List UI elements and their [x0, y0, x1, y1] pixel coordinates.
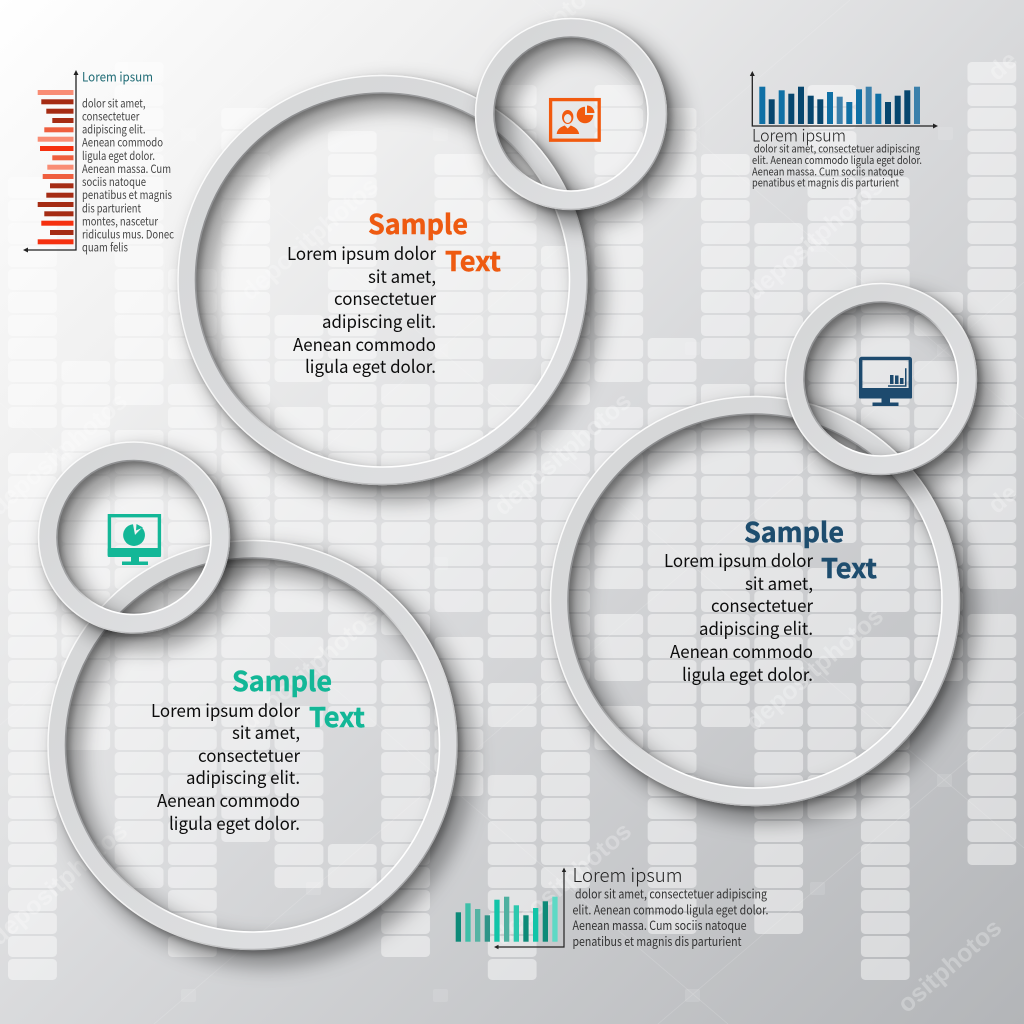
text block: right ring: Text — [821, 547, 877, 586]
text block: right ring: Lorem ipsum dolor — [664, 548, 813, 573]
watermark text: depositphotos — [236, 602, 384, 736]
mini chart text: top left: consectetuer — [82, 108, 140, 124]
mini chart text: top left: adipiscing elit. — [82, 122, 146, 138]
text block: left ring: ligula eget dolor. — [169, 811, 300, 836]
text block: right ring — [664, 511, 877, 687]
small ring: right — [785, 283, 977, 475]
mini chart text: top left: dolor sit amet, — [82, 96, 146, 112]
text block: left ring: Lorem ipsum dolor — [151, 698, 300, 723]
watermark text: depositphotos — [741, 602, 889, 736]
text block: left ring: Aenean commodo — [157, 788, 300, 813]
text block: left ring: consectetuer — [198, 743, 300, 768]
mini chart: bottom vertical bars — [456, 868, 566, 949]
mini chart text: bottom: Aenean massa. Cum sociis natoque — [572, 915, 747, 934]
mini chart: top right vertical bars — [750, 71, 938, 128]
mini chart text: top right: dolor sit amet, consectetuer adipiscing — [754, 142, 920, 156]
mini chart text: top right: penatibus et magnis dis parturient — [752, 176, 899, 190]
mini chart text: top left: Aenean commodo — [82, 135, 163, 151]
mini chart text: top left: sociis natoque — [82, 174, 146, 190]
mini chart text: bottom: dolor sit amet, consectetuer adipiscing — [575, 884, 767, 902]
text block: right ring: sit amet, — [745, 571, 813, 596]
watermark text: depositphotos — [489, 387, 637, 521]
text block: top ring: Lorem ipsum dolor — [287, 241, 436, 266]
mini chart text: top left: quam felis — [82, 240, 128, 256]
mini chart text: bottom — [572, 861, 768, 950]
watermark camera marks — [181, 127, 953, 1002]
big ring: top — [177, 75, 587, 485]
mini chart text: top left: ligula eget dolor. — [82, 148, 155, 164]
text block: right ring: Sample — [744, 511, 844, 550]
watermark text: depositphotos — [489, 817, 637, 951]
icon: monitor with pie chart — [108, 516, 161, 565]
mini chart text: top left: montes, nascetur — [82, 214, 158, 230]
icon: presenter with pie chart — [551, 100, 599, 140]
small ring: left — [38, 442, 230, 634]
big ring: right — [550, 396, 960, 806]
mini chart text: top right: Aenean massa. Cum sociis natoque — [752, 164, 904, 180]
text block: top ring: consectetuer — [334, 286, 436, 311]
text block: right ring: adipiscing elit. — [699, 616, 813, 641]
text block: left ring: Text — [309, 696, 365, 735]
mini chart text: top right: elit. Aenean commodo ligula eget dolor. — [752, 153, 922, 168]
mini chart text: bottom: elit. Aenean commodo ligula eget dolor. — [572, 900, 768, 918]
watermark text: depositphotos — [741, 172, 889, 306]
mini chart text: top left: Aenean massa. Cum — [82, 161, 171, 177]
text block: left ring: adipiscing elit. — [186, 765, 300, 790]
watermark text: de — [983, 479, 1023, 519]
big ring: left — [48, 540, 458, 950]
mini chart text: top right — [752, 122, 922, 190]
text block: top ring: Sample — [368, 203, 468, 242]
text block: top ring: Text — [445, 240, 501, 279]
text block: right ring: Aenean commodo — [670, 639, 813, 664]
text block: top ring — [287, 203, 501, 379]
mini chart text: top left: ridiculus mus. Donec — [82, 227, 174, 243]
text block: top ring: sit amet, — [368, 264, 436, 289]
mini chart text: top left — [82, 66, 174, 256]
text block: left ring: sit amet, — [232, 720, 300, 745]
text block: right ring: ligula eget dolor. — [682, 662, 813, 687]
mini chart: top left horizontal bars — [23, 70, 78, 252]
mini chart text: bottom: penatibus et magnis dis parturient — [572, 931, 742, 950]
small ring: top — [475, 18, 667, 210]
mini chart text: top left: Lorem ipsum — [82, 66, 153, 86]
text block: right ring: consectetuer — [711, 593, 813, 618]
icon: monitor with bar chart — [859, 358, 912, 406]
text block: left ring: Sample — [232, 660, 332, 699]
text block: top ring: Aenean commodo — [293, 332, 436, 357]
text block: top ring: adipiscing elit. — [322, 309, 436, 334]
text block: top ring: ligula eget dolor. — [305, 354, 436, 379]
watermark text: depositphotos — [236, 172, 384, 306]
mini chart text: top right: Lorem ipsum — [752, 122, 846, 146]
watermark text: ositphotos — [892, 913, 1007, 1018]
mini chart text: bottom: Lorem ipsum — [572, 861, 682, 888]
watermark text: de — [983, 46, 1023, 86]
mini chart text: top left: penatibus et magnis — [82, 187, 172, 203]
mini chart text: top left: dis parturient — [82, 200, 142, 216]
text block: left ring — [151, 660, 365, 836]
